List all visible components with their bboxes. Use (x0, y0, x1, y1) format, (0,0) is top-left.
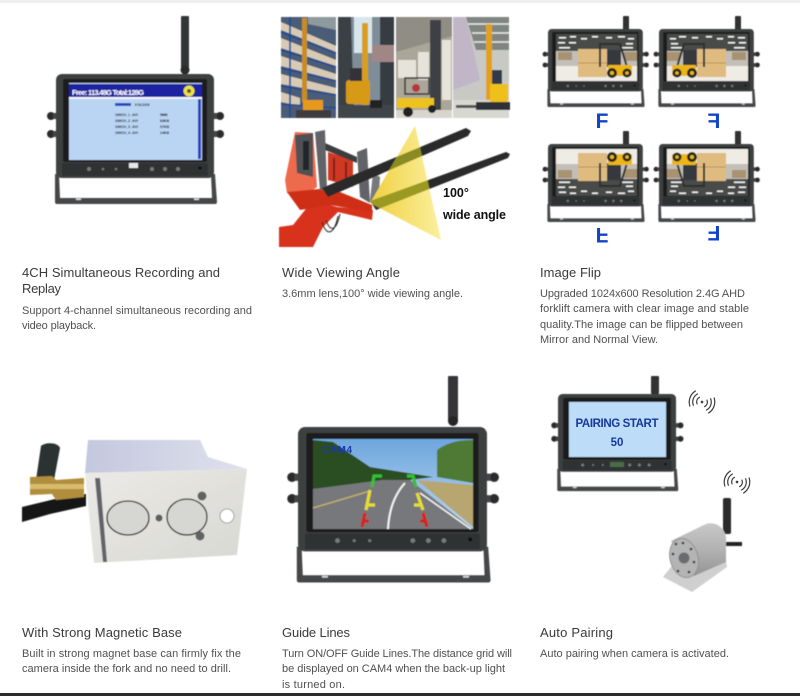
icon: monitor with recording list: 63KB (160, 119, 170, 123)
description: Upgraded 1024x600 Resolution 2.4G AHD (540, 288, 745, 300)
heading: 4CH Simultaneous Recording and (22, 265, 220, 280)
icon: monitor with recording list: 100CH_2 .AVI (115, 119, 138, 123)
icon: monitor with recording list: 100CH_3 .AVI (115, 125, 138, 129)
heading: Image Flip (540, 265, 601, 280)
description: video playback. (22, 320, 96, 332)
panel: 4CH recording (22, 16, 252, 332)
photo: warehouse forklift one (281, 17, 336, 118)
heading: Auto Pairing (540, 625, 613, 640)
icon: letter F mirrored: F (707, 110, 720, 133)
description: Built in strong magnet base can firmly fix the (22, 648, 241, 660)
icon: wireless signal camera (722, 470, 752, 494)
description: Support 4-channel simultaneous recording and (22, 305, 252, 317)
description: 3.6mm lens,100° wide viewing angle. (282, 288, 463, 300)
description: be displayed on CAM4 when the back-up light (282, 663, 505, 675)
icon: monitor with recording list: 100CH_1 .AVI (115, 113, 138, 117)
panel: image flip (540, 16, 760, 346)
monitor: flipped and mirrored view (654, 131, 760, 222)
heading: Guide Lines (282, 625, 350, 640)
icon: monitor with recording list: Free: 113.48G Total:128G (72, 88, 144, 97)
description: Mirror and Normal View. (540, 334, 658, 346)
label: pairing start: PAIRING START (576, 418, 658, 430)
monitor: mirrored view (654, 16, 760, 107)
description: Auto pairing when camera is activated. (540, 648, 729, 660)
description (540, 288, 749, 346)
monitor: road with guide lines (287, 376, 499, 582)
description: is turned on. (282, 679, 345, 691)
label: wide angle: wide angle (442, 208, 506, 222)
illustration: wireless camera (663, 498, 742, 592)
description (282, 648, 512, 691)
photo: warehouse forklift four (453, 17, 510, 118)
description: Turn ON/OFF Guide Lines.The distance grid will (282, 648, 512, 660)
description: quality.The image can be flipped between (540, 319, 743, 331)
description (22, 648, 241, 675)
photo: warehouse forklift two (338, 17, 394, 118)
icon: monitor with recording list: 5MB (160, 113, 168, 117)
description: forklift camera with clear image and stable (540, 303, 749, 315)
label: CAM4: CAM4 (322, 445, 352, 456)
icon: monitor with recording list: 100CH_4 .AVI (115, 131, 138, 135)
illustration: camera box with magnets (22, 440, 247, 563)
monitor: flipped view (543, 131, 649, 222)
monitor: normal view (543, 16, 649, 107)
icon: monitor with recording list: 14KB (160, 131, 170, 135)
icon: monitor with recording list (47, 16, 224, 204)
description (22, 305, 252, 332)
heading: Wide Viewing Angle (282, 265, 400, 280)
panel: magnetic base (22, 440, 247, 675)
icon: letter F flipped: F (596, 223, 609, 246)
panel: auto pairing (540, 376, 752, 660)
icon: letter F flipped and mirrored: F (707, 221, 720, 244)
photo: warehouse forklift three (396, 17, 452, 118)
icon: letter F normal: F (596, 110, 609, 133)
heading line two: Replay (22, 281, 62, 296)
heading: With Strong Magnetic Base (22, 625, 182, 640)
illustration: fork carriage with viewing cone (279, 126, 510, 247)
label: 100 degree: 100° (443, 186, 469, 200)
description: camera inside the fork and no need to drill. (22, 663, 231, 675)
panel: wide viewing angle (279, 17, 510, 300)
label: countdown: 50 (611, 437, 623, 449)
icon: monitor with recording list: 37KB (160, 125, 170, 129)
monitor: pairing screen (551, 376, 683, 491)
icon: wireless signal monitor (687, 390, 717, 414)
panel: guide lines (282, 376, 512, 691)
icon: monitor with recording list: FOLDER (135, 103, 150, 107)
